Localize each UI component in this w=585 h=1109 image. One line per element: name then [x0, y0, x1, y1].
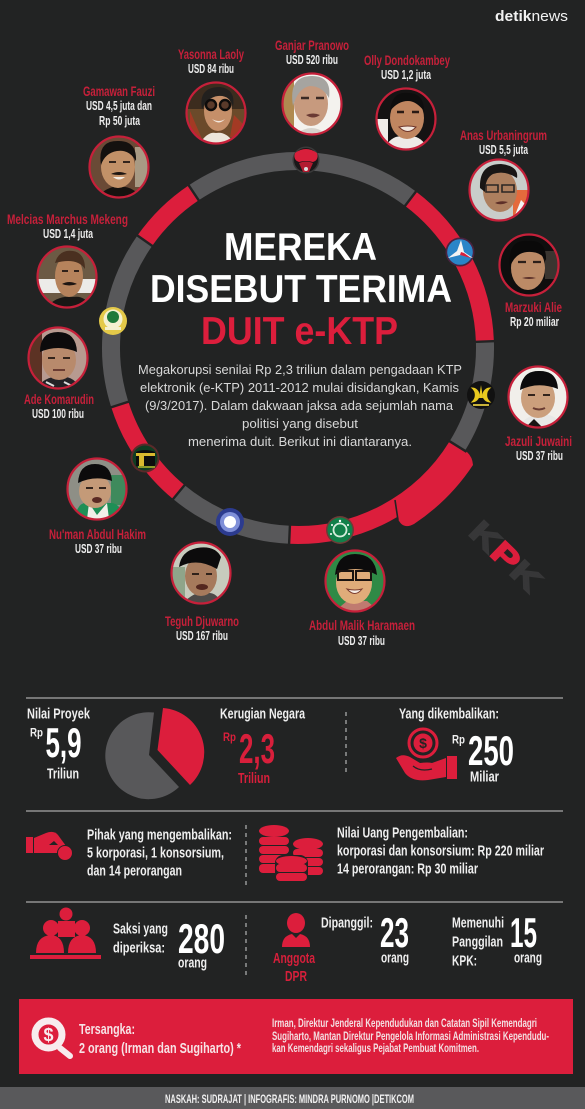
text: Pihak yang mengembalikan: 5 korporasi, 1 konsorsium,: [87, 844, 224, 862]
icon: PPP party badge: [130, 444, 160, 472]
text: Nilai Uang Pengembalian: 14 perorangan: Rp 30 miliar: [337, 860, 478, 878]
person: Ganjar Pranowo: USD 520 ribu: [286, 53, 338, 67]
stat: Kerugian Negara: [220, 706, 305, 787]
stat: Dipanggil: orang: [381, 950, 409, 966]
person: Jazuli Juwaini: USD 37 ribu: [516, 449, 563, 463]
title: MEREKA: [224, 226, 377, 269]
person: Melcias Marchus Mekeng: Melcias Marchus Mekeng: [7, 211, 128, 227]
stat: Kerugian Negara: 2,3: [239, 725, 275, 772]
icon: PKB party badge: [326, 516, 354, 544]
text: Pihak yang mengembalikan: dan 14 perorangan: [87, 862, 182, 880]
pie chart: project value vs loss: [105, 708, 204, 799]
person: Abdul Malik Haramaen: Abdul Malik Haramaen: [309, 617, 415, 633]
stat: Memenuhi Panggilan KPK: KPK:: [452, 952, 477, 970]
stat: Memenuhi Panggilan KPK: Panggilan: [452, 934, 503, 950]
icon: coin stacks: [259, 825, 323, 883]
stat: saksi diperiksa: [113, 915, 225, 972]
person: Ade Komarudin: Ade Komarudin: [24, 391, 94, 407]
person: Gamawan Fauzi: USD 4,5 juta dan: [86, 99, 152, 113]
person: Marzuki Alie: Marzuki Alie: [505, 299, 562, 315]
person: Anas Urbaningrum: USD 5,5 juta: [479, 143, 529, 157]
stat: Dipanggil: Dipanggil:: [321, 914, 373, 932]
stat: saksi diperiksa: orang: [178, 954, 207, 972]
icon: PDIP party badge: [292, 146, 320, 174]
stat: Nilai Proyek: [27, 706, 90, 782]
text: Nilai Uang Pengembalian: Nilai Uang Pengembalian:: [337, 824, 468, 842]
person: Ade Komarudin: USD 100 ribu: [32, 407, 84, 421]
stat: Kerugian Negara: Kerugian Negara: [220, 706, 305, 722]
logo: detiknews: detiknews: [495, 8, 568, 25]
stat: saksi diperiksa: diperiksa:: [113, 940, 165, 956]
icon: fist handing money: [26, 832, 72, 860]
panel: tersangka: Tersangka:: [79, 1021, 135, 1038]
person: Ade Komarudin: [24, 328, 94, 421]
person: Teguh Djuwarno: [165, 542, 239, 643]
icon: witnesses group: [30, 908, 101, 959]
person: Anas Urbaningrum: [460, 127, 547, 220]
stat: Kerugian Negara: Rp: [223, 730, 236, 744]
stat: Dipanggil: 23: [380, 909, 409, 956]
person: Melcias Marchus Mekeng: [7, 211, 128, 308]
intro paragraph: menerima duit. Berikut ini diantaranya.: [188, 434, 412, 449]
person: Teguh Djuwarno: USD 167 ribu: [176, 629, 228, 643]
stat: Memenuhi Panggilan KPK: 15: [510, 909, 537, 956]
stat: Yang dikembalikan: [396, 706, 514, 786]
person: Gamawan Fauzi: [83, 83, 155, 198]
title: DUIT e-KTP: [201, 310, 398, 353]
stat: Kerugian Negara: Triliun: [238, 770, 270, 787]
person: Yasonna Laoly: [178, 46, 246, 144]
person: Abdul Malik Haramaen: [309, 550, 415, 648]
title: [150, 226, 452, 353]
icon: magnifier with dollar: [35, 1021, 70, 1056]
person: Melcias Marchus Mekeng: USD 1,4 juta: [43, 227, 94, 241]
person: Nu'man Abdul Hakim: [49, 458, 146, 556]
person: Ganjar Pranowo: [275, 37, 349, 134]
stat: saksi diperiksa: Saksi yang: [113, 920, 168, 938]
intro paragraph: politisi yang disebut: [242, 416, 358, 431]
person: Yasonna Laoly: USD 84 ribu: [188, 62, 234, 76]
person: Gamawan Fauzi: Gamawan Fauzi: [83, 83, 155, 99]
footer credit bar: NASKAH: SUDRAJAT | INFOGRAFIS: MINDRA PURNOMO |DETIKCOM: [165, 1094, 414, 1106]
person: Anas Urbaningrum: Anas Urbaningrum: [460, 127, 547, 143]
person: Olly Dondokambey: USD 1,2 juta: [381, 68, 432, 82]
stat: Nilai Proyek: Triliun: [47, 766, 79, 782]
intro paragraph: (9/3/2017). Dalam dakwaan jaksa ada sejumlah nama: [145, 398, 454, 413]
person: Teguh Djuwarno: Teguh Djuwarno: [165, 613, 239, 629]
person: Marzuki Alie: Rp 20 miliar: [510, 315, 559, 329]
icon: hand holding coin: $: [419, 735, 427, 751]
intro paragraph: elektronik (e-KTP) 2011-2012 mulai disidangkan, Kamis: [140, 380, 459, 395]
icon: DPR member: DPR: [285, 968, 307, 985]
title: DISEBUT TERIMA: [150, 268, 452, 311]
stat: Memenuhi Panggilan KPK: [452, 909, 542, 970]
stat: Nilai Proyek: Nilai Proyek: [27, 706, 90, 722]
icon: DPR member: [273, 913, 315, 985]
stat: Memenuhi Panggilan KPK: Memenuhi: [452, 914, 504, 932]
person: Nu'man Abdul Hakim: Nu'man Abdul Hakim: [49, 526, 146, 542]
stat: Nilai Proyek: 5,9: [46, 719, 82, 766]
intro paragraph: [138, 362, 462, 449]
footer credit bar: [0, 1087, 585, 1109]
stat: saksi diperiksa: 280: [178, 915, 225, 962]
icon: PKS party badge: [467, 381, 495, 409]
icon: magnifier with dollar: $: [43, 1025, 54, 1045]
person: Abdul Malik Haramaen: USD 37 ribu: [338, 634, 385, 648]
panel: tersangka: kan Kemendagri sekaligus Pejabat Pembuat Komitmen.: [272, 1043, 479, 1055]
person: Ganjar Pranowo: Ganjar Pranowo: [275, 37, 349, 53]
stat: Yang dikembalikan: Rp: [452, 732, 465, 746]
person: Yasonna Laoly: Yasonna Laoly: [178, 46, 244, 62]
stat: Yang dikembalikan: 250: [468, 727, 514, 774]
intro paragraph: Megakorupsi senilai Rp 2,3 triliun dalam pengadaan KTP: [138, 362, 462, 377]
icon: DPR member: Anggota: [273, 950, 315, 967]
stat: Nilai Proyek: Rp: [30, 726, 43, 740]
icon: PAN party badge: [216, 508, 244, 536]
person: Nu'man Abdul Hakim: USD 37 ribu: [75, 542, 122, 556]
watermark: KPK: KPK: [463, 514, 549, 599]
ring: segmented party circle: [109, 161, 496, 546]
stat: Yang dikembalikan: Yang dikembalikan:: [399, 706, 499, 722]
panel: tersangka: [19, 999, 573, 1074]
icon: Demokrat party badge: [446, 238, 474, 266]
person: Olly Dondokambey: Olly Dondokambey: [364, 52, 450, 68]
stat: Dipanggil: [321, 909, 409, 966]
text: Pihak yang mengembalikan: Pihak yang mengembalikan:: [87, 826, 232, 844]
panel: tersangka: 2 orang (Irman dan Sugiharto) *: [79, 1040, 241, 1057]
icon: Golkar party badge: [99, 307, 127, 335]
stat: Memenuhi Panggilan KPK: orang: [514, 950, 542, 966]
person: Gamawan Fauzi: Rp 50 juta: [99, 114, 141, 128]
person: Marzuki Alie: [499, 234, 562, 329]
text: Pihak yang mengembalikan: [87, 826, 232, 880]
person: Olly Dondokambey: [364, 52, 450, 150]
person: Jazuli Juwaini: [505, 366, 572, 463]
text: Nilai Uang Pengembalian: [337, 824, 544, 878]
stat: Yang dikembalikan: Miliar: [470, 768, 499, 786]
